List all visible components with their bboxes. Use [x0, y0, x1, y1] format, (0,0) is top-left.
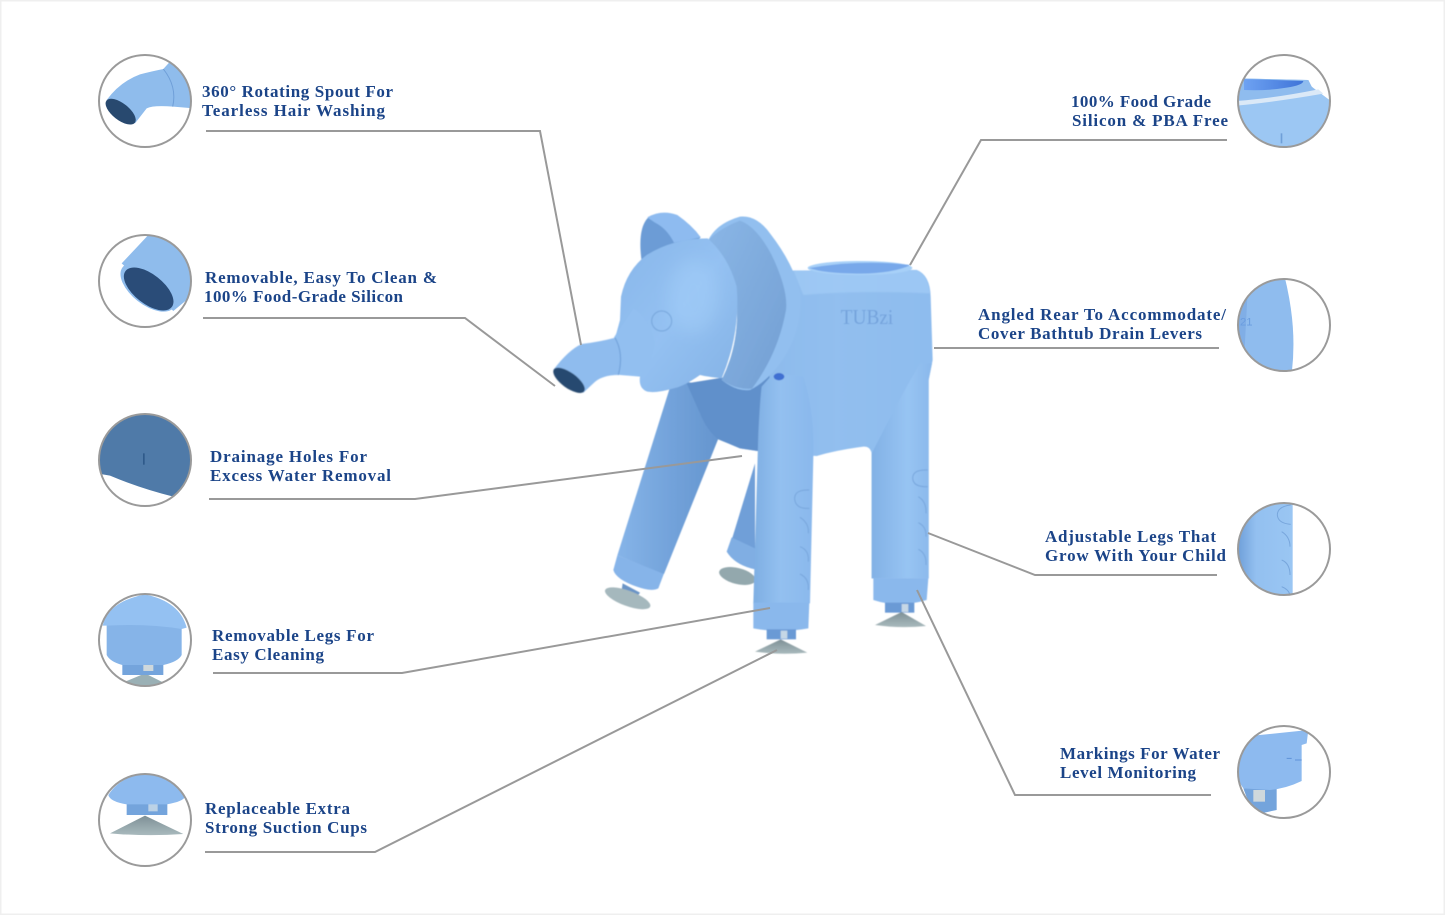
callout: water level markings: [917, 590, 1330, 818]
label: water level markings: Level Monitoring: [1060, 763, 1196, 782]
label: suction cups: [205, 799, 367, 837]
label: adjustable legs: Adjustable Legs That: [1045, 527, 1216, 546]
elephant product illustration: [549, 213, 933, 654]
thumbnail: top opening: [1237, 55, 1332, 150]
front leg: [753, 373, 814, 654]
leader line: suction cups: [205, 650, 777, 852]
rotating spout: [549, 338, 621, 398]
label: spout: 360° Rotating Spout For: [202, 82, 393, 101]
leader line: removable legs: [213, 608, 770, 673]
callout: drainage holes: [97, 413, 742, 515]
label: removable spout: 100% Food-Grade Silicon: [204, 287, 404, 306]
leader line: adjustable legs: [928, 533, 1217, 575]
callout: angled rear: [934, 278, 1330, 373]
leader line: drainage holes: [209, 456, 742, 499]
thumbnail: drainage hole: [97, 413, 193, 515]
label: adjustable legs: Grow With Your Child: [1045, 546, 1227, 565]
callout: removable spout: [99, 235, 555, 386]
label: removable legs: Removable Legs For: [212, 626, 374, 645]
label: angled rear: [978, 305, 1226, 343]
body top surface: [793, 270, 930, 295]
leader line: removable spout: [203, 318, 555, 386]
callout: suction cups: [99, 650, 777, 866]
label: water level markings: [1060, 744, 1220, 782]
water opening: [808, 261, 912, 275]
thumbnail: level markings: [1237, 726, 1330, 818]
eye: [652, 311, 672, 331]
callout: adjustable legs: [928, 502, 1330, 597]
label: food grade: Silicon & PBA Free: [1072, 111, 1228, 130]
callout: removable legs: [99, 594, 770, 692]
callout: food grade: [910, 55, 1332, 265]
head highlight: [668, 260, 718, 333]
thumbnail: leg foot: [99, 594, 191, 692]
label: drainage holes: Excess Water Removal: [210, 466, 391, 485]
label: angled rear: Angled Rear To Accommodate/: [978, 305, 1226, 324]
label: angled rear: Cover Bathtub Drain Levers: [978, 324, 1202, 343]
leader line: spout: [206, 131, 581, 345]
label: removable legs: [212, 626, 374, 664]
body: [693, 270, 933, 578]
thumbnail: leg notches: [1237, 502, 1330, 597]
leader line: food grade: [910, 140, 1227, 265]
label: water level markings: Markings For Water: [1060, 744, 1220, 763]
trunk base: [614, 308, 655, 375]
thumbnail: spout: [99, 55, 193, 147]
large ear: [708, 217, 801, 390]
embossed brand mark: TUBzi: [841, 307, 894, 329]
label: food grade: 100% Food Grade: [1071, 92, 1211, 111]
rear ear: [640, 213, 701, 267]
leader line: angled rear: [934, 347, 1219, 349]
thumbnail: suction cup: [99, 773, 191, 866]
label: adjustable legs: [1045, 527, 1227, 565]
label: spout: [202, 82, 393, 120]
far rear leg: [717, 463, 757, 588]
rear right leg highlight: [872, 363, 932, 578]
underside shadow: [687, 370, 770, 452]
leader line: water level markings: [917, 590, 1211, 795]
label: suction cups: Strong Suction Cups: [205, 818, 367, 837]
drainage hole: [774, 373, 784, 380]
rear right foot: [873, 470, 928, 627]
label: removable spout: [204, 268, 437, 306]
label: removable spout: Removable, Easy To Clean &: [205, 268, 437, 287]
callout: rotating spout: [99, 55, 581, 345]
thumbnail: angled rear: [1237, 278, 1330, 373]
head: [615, 238, 737, 392]
thumbnail: angled rear: 21: [1240, 317, 1253, 329]
thumbnail: spout opening: [99, 235, 197, 327]
label: spout: Tearless Hair Washing: [202, 101, 386, 120]
label: drainage holes: [210, 447, 391, 485]
front left diagonal leg: [602, 377, 740, 614]
label: removable legs: Easy Cleaning: [212, 645, 324, 664]
label: drainage holes: Drainage Holes For: [210, 447, 367, 466]
label: suction cups: Replaceable Extra: [205, 799, 350, 818]
label: food grade: [1071, 92, 1228, 130]
